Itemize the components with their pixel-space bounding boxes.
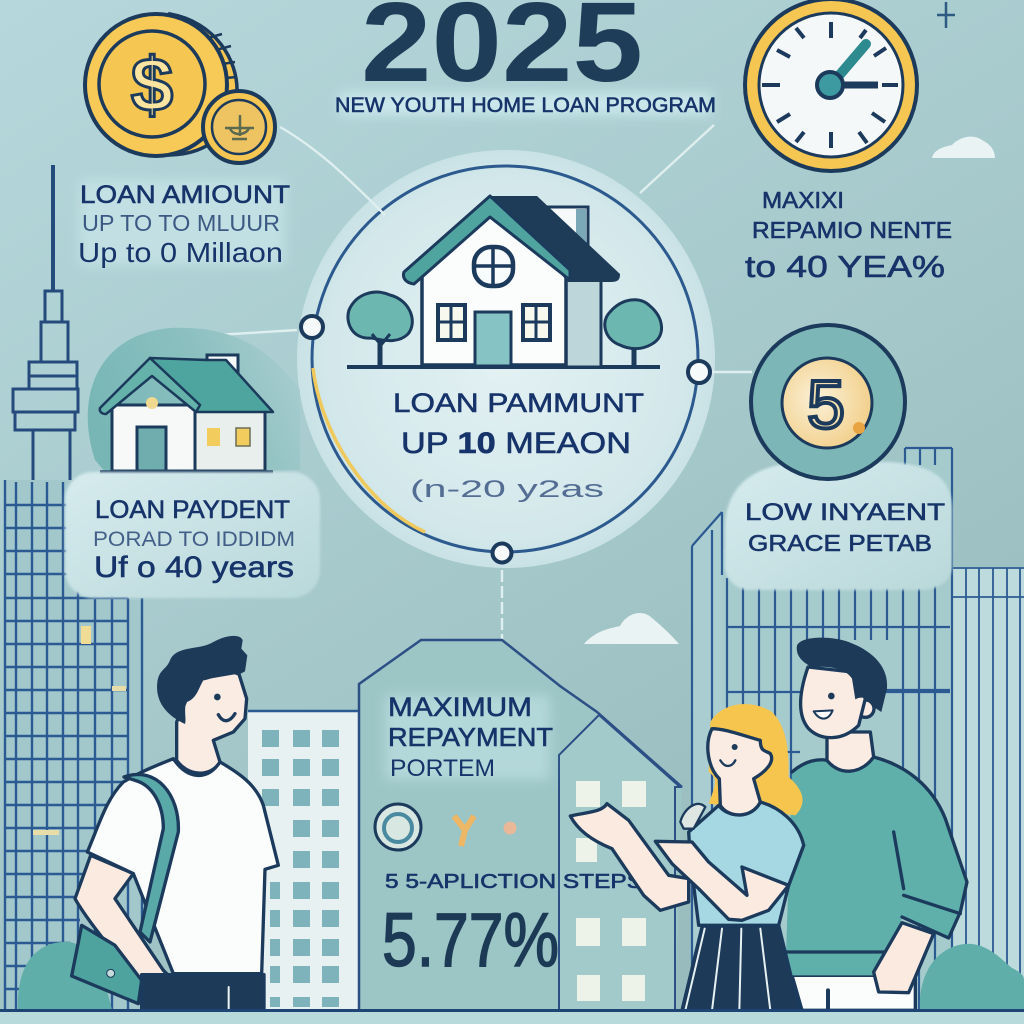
icon: small house bbox=[88, 328, 300, 472]
text: central loan payment bbox=[393, 388, 644, 503]
ground line bbox=[0, 1009, 1024, 1024]
person: man with bag bbox=[72, 636, 278, 1010]
hair bbox=[797, 638, 887, 712]
clouds and sparkle bbox=[584, 2, 995, 644]
white shirt bbox=[87, 759, 278, 974]
person: man in green sweater bbox=[785, 638, 967, 1010]
white building behind man bbox=[248, 710, 358, 1010]
text block: maximum repayment: REPAMIO NENTE bbox=[752, 217, 952, 243]
smile and eye bbox=[732, 744, 738, 750]
neck bbox=[827, 732, 874, 771]
smile and eye bbox=[828, 693, 835, 699]
trousers bbox=[142, 975, 264, 1010]
text: application steps and rate: 5 5-APLICTION STEPS bbox=[385, 871, 643, 893]
text block: maximum repayment: MAXIXI bbox=[762, 187, 844, 213]
arm folded bbox=[655, 841, 789, 920]
right grid buildings bbox=[692, 448, 1024, 1010]
face bbox=[708, 729, 772, 815]
left grid building bbox=[5, 480, 142, 1010]
subtitle: NEW YOUTH HOME LOAN PROGRAM bbox=[335, 94, 716, 117]
text: central loan payment: LOAN PAMMUNT bbox=[393, 388, 644, 418]
tower skyline bbox=[13, 165, 78, 480]
arm bbox=[874, 923, 934, 993]
icon: stacked coins: $ bbox=[131, 43, 173, 128]
panel: loan payment card: Uf o 40 years bbox=[94, 551, 294, 584]
text block: maximum repayment: to 40 YEA% bbox=[745, 249, 945, 284]
central lower building bbox=[359, 640, 682, 1010]
text: application steps and rate bbox=[382, 871, 643, 983]
small icons row bbox=[375, 804, 516, 850]
text: central loan payment: UP 10 MEAON bbox=[401, 427, 631, 460]
nodes bbox=[301, 316, 710, 562]
panel: loan payment card: LOAN PAYDENT bbox=[95, 496, 290, 524]
connector lines bbox=[217, 125, 752, 660]
hair bbox=[157, 636, 247, 724]
sweater bbox=[785, 757, 967, 975]
blue shirt bbox=[689, 802, 804, 925]
arm bbox=[75, 855, 180, 996]
white trousers bbox=[792, 975, 915, 1010]
text block: loan amount: LOAN AMIOUNT bbox=[80, 181, 290, 209]
person: woman with yellow hair bbox=[570, 704, 804, 1010]
text: central loan payment: (n-20 y2as bbox=[410, 476, 604, 503]
panel: grace period card: LOW INYAENT bbox=[745, 499, 945, 526]
skirt bbox=[682, 925, 799, 1010]
text block: maximum repayment program: MAXIMUM bbox=[388, 692, 532, 722]
text block: loan amount: Up to 0 Millaon bbox=[78, 237, 283, 268]
text: application steps and rate: 5.77% bbox=[382, 898, 559, 983]
panel: central circle bbox=[297, 150, 715, 568]
panel: grace period card: GRACE PETAB bbox=[748, 530, 932, 556]
left tree bbox=[348, 292, 412, 367]
text block: maximum repayment bbox=[745, 187, 952, 284]
smile and eye bbox=[218, 714, 235, 721]
right tree bbox=[605, 300, 662, 367]
hair bbox=[709, 704, 803, 815]
shoulder hand bbox=[680, 804, 705, 829]
bag strap bbox=[124, 774, 178, 942]
panel: loan payment card: PORAD TO IDDIDM bbox=[93, 528, 295, 551]
right bush bbox=[920, 944, 1024, 1010]
neck and face bbox=[177, 672, 247, 773]
bag bbox=[72, 925, 142, 1004]
icon: stacked coins bbox=[85, 14, 275, 163]
yellow arc bbox=[313, 368, 425, 532]
icon: clock bbox=[745, 0, 917, 171]
icon: number five coin bbox=[751, 325, 905, 479]
text block: maximum repayment program bbox=[385, 692, 553, 782]
icon: number five coin: 5 bbox=[807, 367, 845, 443]
text block: loan amount: UP TO TO MLUUR bbox=[82, 210, 280, 236]
arm pointing bbox=[570, 804, 689, 910]
central house and trees bbox=[347, 196, 662, 367]
ear bbox=[857, 700, 874, 717]
text block: maximum repayment program: PORTEM bbox=[390, 755, 495, 782]
sleeve bbox=[742, 830, 804, 885]
text block: maximum repayment program: REPAYMENT bbox=[388, 722, 553, 752]
panel: grace period card bbox=[725, 462, 952, 590]
panel: loan payment card bbox=[65, 472, 320, 598]
text block: loan amount bbox=[78, 180, 290, 268]
face bbox=[801, 667, 865, 738]
left bush bbox=[18, 942, 112, 1010]
